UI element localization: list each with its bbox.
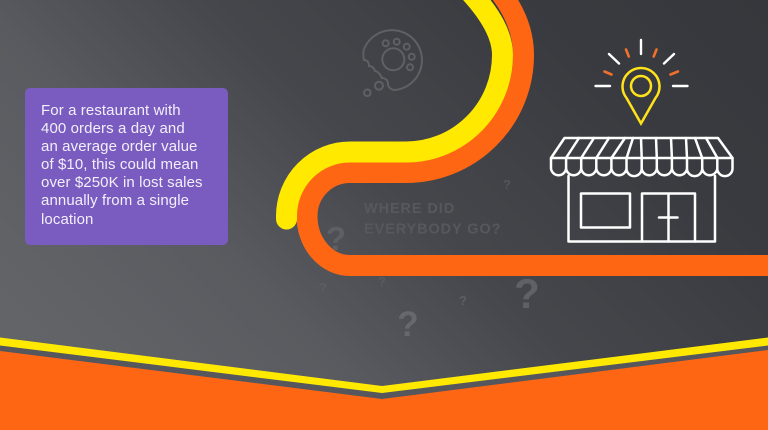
awning <box>551 138 732 176</box>
icon: background question marks: ? <box>319 280 327 295</box>
yellow chevron stripe <box>0 338 768 393</box>
icon: storefront <box>551 138 732 242</box>
icon: pin <box>623 68 660 124</box>
callout text: of $10, this could mean <box>41 156 198 173</box>
building walls <box>568 176 715 242</box>
callout text: over $250K in lost sales <box>41 174 203 191</box>
icon: background question marks: ? <box>459 293 467 308</box>
icon: background question marks <box>319 177 540 344</box>
window <box>581 194 630 228</box>
heading: where did everybody go: WHERE DID <box>364 201 455 217</box>
icon: background question marks: ? <box>397 305 419 344</box>
icon: bitten donut <box>363 30 422 96</box>
callout text: 400 orders a day and <box>41 120 185 137</box>
heading: where did everybody go: EVERYBODY GO? <box>364 222 501 238</box>
icon: orange rays <box>604 50 678 74</box>
yellow road ribbon <box>286 0 502 219</box>
icon: background question marks: ? <box>503 177 511 192</box>
bottom orange chevron <box>0 338 768 430</box>
icon: white rays <box>596 40 688 86</box>
orange road ribbon <box>307 0 768 266</box>
callout text: annually from a single <box>41 192 189 209</box>
door <box>642 194 695 242</box>
callout text: For a restaurant with <box>41 102 181 119</box>
icon: location pin with rays <box>596 40 688 124</box>
icon: background question marks: ? <box>514 270 540 317</box>
callout text <box>41 102 203 228</box>
icon: background question marks: ? <box>378 274 386 289</box>
callout text: location <box>41 211 94 228</box>
icon: background question marks: ? <box>326 220 346 257</box>
callout text: an average order value <box>41 138 197 155</box>
callout: lost sales panel <box>24 88 228 245</box>
